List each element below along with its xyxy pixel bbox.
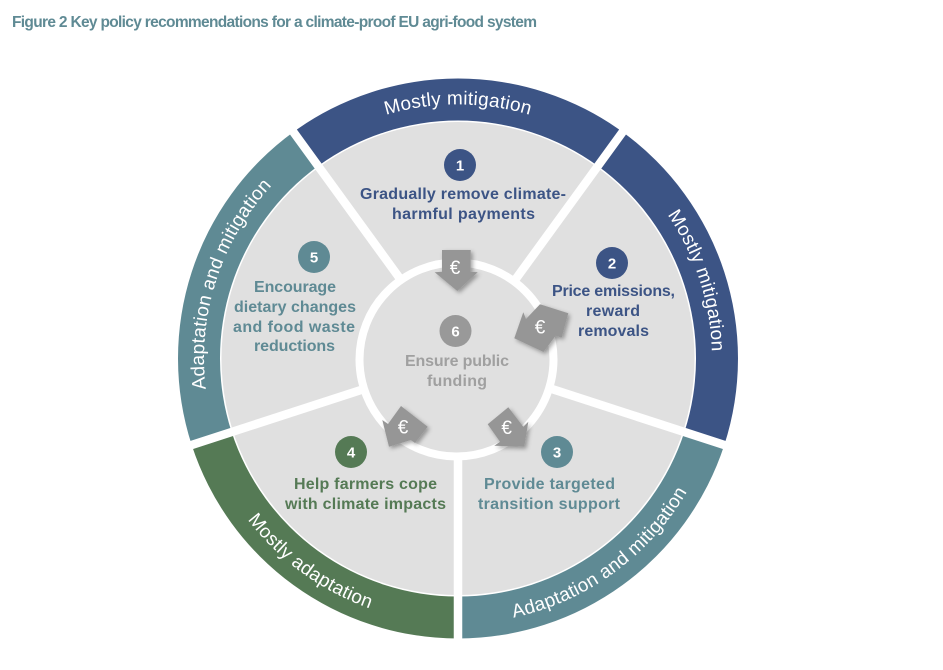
panel 1: 1	[456, 158, 464, 174]
outer ring segment: top	[296, 78, 619, 164]
panel 3: 3	[553, 444, 561, 462]
panel 5: Encourage	[254, 279, 336, 296]
panel 3: Provide targeted	[484, 476, 615, 493]
arrow: euro right: €	[535, 318, 546, 338]
panel 6: funding	[427, 373, 487, 390]
panel 5: reductions	[254, 338, 335, 355]
central circle	[360, 262, 554, 456]
arrow: euro top	[435, 250, 478, 291]
arrow: euro bottom left	[382, 406, 428, 447]
outer ring segment: bottom right: Adaptation and mitigation	[514, 488, 686, 618]
panel 1: Gradually remove climate-	[360, 186, 566, 203]
panel 4: with climate impacts	[284, 496, 446, 513]
outer ring segment: left: Adaptation and mitigation	[190, 180, 271, 390]
panel 3	[478, 436, 621, 513]
arrow: euro bottom right: €	[501, 418, 512, 439]
panel 2	[552, 247, 675, 340]
panel 1	[360, 149, 566, 223]
arrow: euro bottom right	[488, 407, 528, 447]
outer ring segment: left	[178, 134, 315, 441]
panel 1: harmful payments	[392, 206, 535, 223]
panel 5: dietary changes	[234, 299, 356, 316]
panel 2: Price emissions,	[552, 283, 675, 300]
grey inner disc	[222, 122, 694, 595]
panel 5	[233, 241, 356, 355]
panel 6: Ensure public	[405, 353, 509, 370]
panel 2: removals	[578, 323, 649, 340]
outer ring segment: top: Mostly mitigation	[384, 90, 530, 114]
panel 4	[284, 436, 446, 513]
arrow: euro right	[514, 304, 568, 352]
arrow: euro bottom left: €	[398, 418, 409, 439]
panel 4: 4	[347, 444, 356, 462]
panel 6	[405, 315, 509, 390]
panel 2: 2	[608, 256, 616, 272]
panel 6: 6	[451, 324, 460, 340]
panel 5: and food waste	[233, 319, 355, 336]
outer ring segment: right: Mostly mitigation	[668, 208, 724, 350]
panel 3: transition support	[478, 496, 621, 513]
panel 2: reward	[586, 303, 640, 320]
arrow: euro top: €	[450, 258, 461, 279]
outer ring segment: bottom left: Mostly adaptation	[248, 512, 372, 608]
outer ring segment: right	[601, 134, 738, 441]
panel 5: 5	[310, 250, 318, 266]
title: Figure 2 Key policy recommendations for a climate-proof EU agri-food system	[12, 14, 537, 31]
outer ring segment: bottom left	[193, 436, 454, 638]
panel 4: Help farmers cope	[294, 476, 437, 493]
wheel diagram	[178, 78, 738, 638]
outer ring segment: bottom right	[462, 436, 723, 638]
